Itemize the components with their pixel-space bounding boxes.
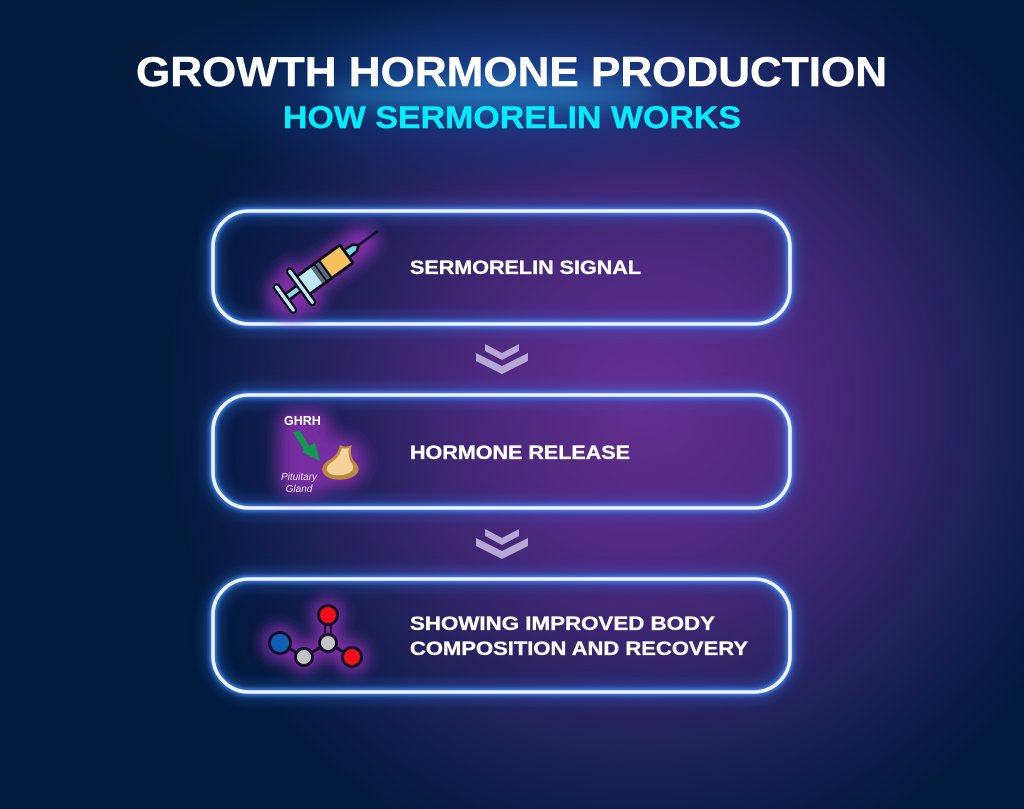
icon: syringe bbox=[272, 216, 388, 315]
title bbox=[136, 48, 887, 135]
arrow: green bbox=[293, 431, 320, 461]
label: improved body composition: SHOWING IMPROVED BODY bbox=[410, 613, 715, 635]
icon: pituitary gland: Gland bbox=[286, 484, 313, 495]
heading: main title: GROWTH HORMONE PRODUCTION bbox=[136, 48, 887, 95]
label: hormone release: HORMONE RELEASE bbox=[410, 442, 630, 464]
icon: pituitary gland bbox=[278, 410, 366, 496]
label: GHRH: GHRH bbox=[284, 414, 321, 428]
panel: sermorelin signal bbox=[213, 211, 790, 324]
gland bbox=[322, 445, 358, 480]
label: improved body composition bbox=[410, 613, 748, 660]
heading: subtitle: HOW SERMORELIN WORKS bbox=[283, 99, 741, 135]
label: sermorelin signal: SERMORELIN SIGNAL bbox=[410, 257, 641, 279]
panel: hormone release bbox=[213, 395, 790, 508]
icon: molecule bbox=[263, 599, 368, 673]
arrow: chevrons 1 bbox=[476, 344, 528, 374]
arrow: chevrons 2 bbox=[476, 529, 528, 559]
panel: improved body composition bbox=[213, 579, 790, 692]
label: improved body composition: COMPOSITION AND RECOVERY bbox=[410, 638, 748, 660]
label: pituitary gland: Pituitary bbox=[281, 472, 318, 483]
